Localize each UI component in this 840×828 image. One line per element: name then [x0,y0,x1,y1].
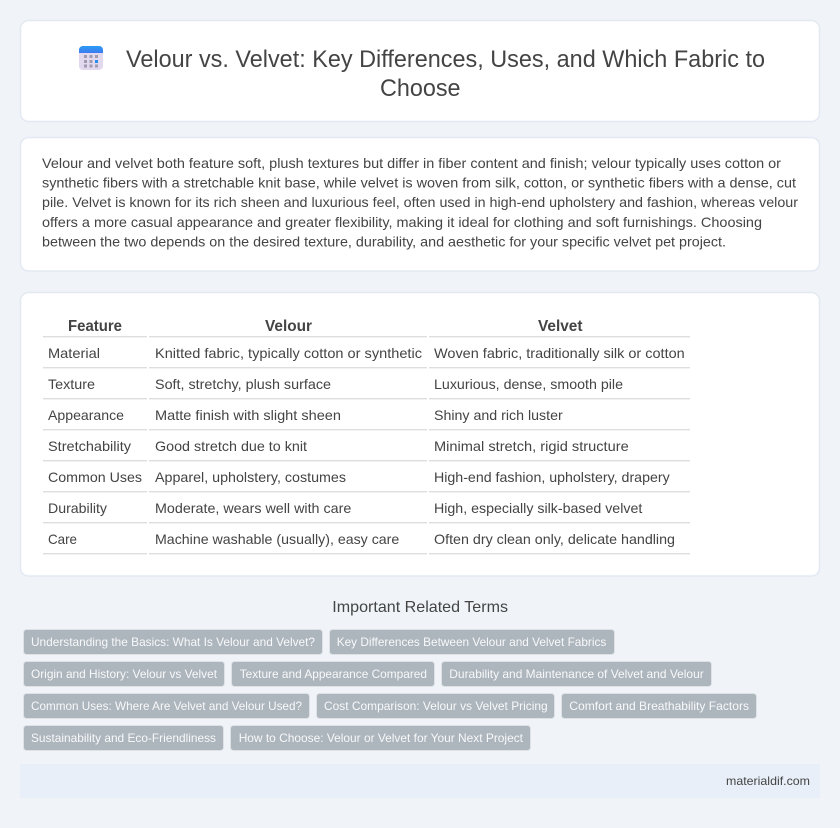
chip: texture and appearance [232,662,434,686]
chip: cost comparison [316,694,554,718]
chip: key differences [330,630,614,654]
text block: introduction paragraph: offers a more casual appearance and greater flexibility, making it ideal for clothing and soft furnishings. Choosing [42,214,762,230]
table row: texture [43,376,690,399]
table row: stretchability: Stretchability [48,438,131,454]
chip: durability and maintenance [442,662,712,686]
chip: comfort and breathability: Comfort and Breathability Factors [569,699,749,713]
chip: sustainability [24,726,224,750]
title: Velour vs. Velvet: Key Differences, Uses, and Which Fabric to [126,46,765,73]
table row: appearance: Shiny and rich luster [434,407,563,423]
chip: understanding the basics: Understanding the Basics: What Is Velour and Velvet? [31,635,315,649]
title [126,46,765,102]
related terms chips [24,630,756,750]
title: Choose [380,75,460,102]
panel: introduction [20,138,820,271]
table row: stretchability [43,438,690,461]
footer [20,764,820,798]
table row: material [43,345,690,368]
chip: origin and history [24,662,224,686]
table row: durability: Moderate, wears well with care [155,500,352,516]
text block: introduction paragraph: Velour and velvet both feature soft, plush textures but differ in fiber content and finish; velour typically uses cotton or [42,155,781,171]
table header row: Velour [265,318,312,335]
table row: care: Care [48,531,77,547]
heading: important related terms: Important Related Terms [332,599,508,616]
table row: care: Often dry clean only, delicate handling [434,531,675,547]
chip: texture and appearance: Texture and Appearance Compared [240,667,427,681]
table row: material: Material [48,345,100,361]
text block: introduction paragraph [42,155,798,249]
table header row [43,318,690,337]
icon: calendar [79,46,103,70]
table row: stretchability: Good stretch due to knit [155,438,307,454]
table row: texture: Texture [48,376,95,392]
table row: common uses: High-end fashion, upholstery, drapery [434,469,670,485]
table row: durability: Durability [48,500,107,516]
table row: durability: High, especially silk-based velvet [434,500,642,516]
table row: common uses: Apparel, upholstery, costumes [155,469,346,485]
table row: common uses [43,469,690,492]
chip: key differences: Key Differences Between Velour and Velvet Fabrics [337,635,606,649]
chip: common uses: Common Uses: Where Are Velvet and Velour Used? [31,699,302,713]
table row: common uses: Common Uses [48,469,142,485]
table row: care: Machine washable (usually), easy care [155,531,400,547]
table header row: Velvet [538,318,583,335]
table row: material: Knitted fabric, typically cotton or synthetic [155,345,422,361]
text block: introduction paragraph: between the two depends on the desired texture, durability, and aesthetic for your specific velvet pet project. [42,233,726,249]
chip: understanding the basics [24,630,322,654]
chip: comfort and breathability [562,694,756,718]
footer source text: materialdif.com [726,774,810,788]
panel: comparison table [20,292,820,576]
chip: how to choose [230,726,530,750]
table header row: Feature [68,318,122,335]
table row: durability [43,500,690,523]
table row: appearance [43,407,690,430]
table row: stretchability: Minimal stretch, rigid structure [434,438,629,454]
chip: cost comparison: Cost Comparison: Velour vs Velvet Pricing [324,699,548,713]
chip: how to choose: How to Choose: Velour or Velvet for Your Next Project [239,731,524,745]
chip: sustainability: Sustainability and Eco-Friendliness [31,731,216,745]
chip: origin and history: Origin and History: Velour vs Velvet [31,667,218,681]
text block: introduction paragraph: pile. Velvet is known for its rich sheen and luxurious feel, often used in high-end upholstery and fashion, whereas velour [42,194,798,210]
panel: header [20,20,820,122]
chip: durability and maintenance: Durability and Maintenance of Velvet and Velour [449,667,704,681]
table row: appearance: Matte finish with slight sheen [155,407,341,423]
table row: material: Woven fabric, traditionally silk or cotton [434,345,685,361]
table row: care [43,531,690,554]
table row: appearance: Appearance [48,407,124,423]
table row: texture: Luxurious, dense, smooth pile [434,376,623,392]
chip: common uses [24,694,310,718]
table row: texture: Soft, stretchy, plush surface [155,376,331,392]
text block: introduction paragraph: synthetic fibers with a stretchable knit base, while velvet is woven from silk, cotton, or synthetic fibers with a dense, cut [42,175,796,191]
